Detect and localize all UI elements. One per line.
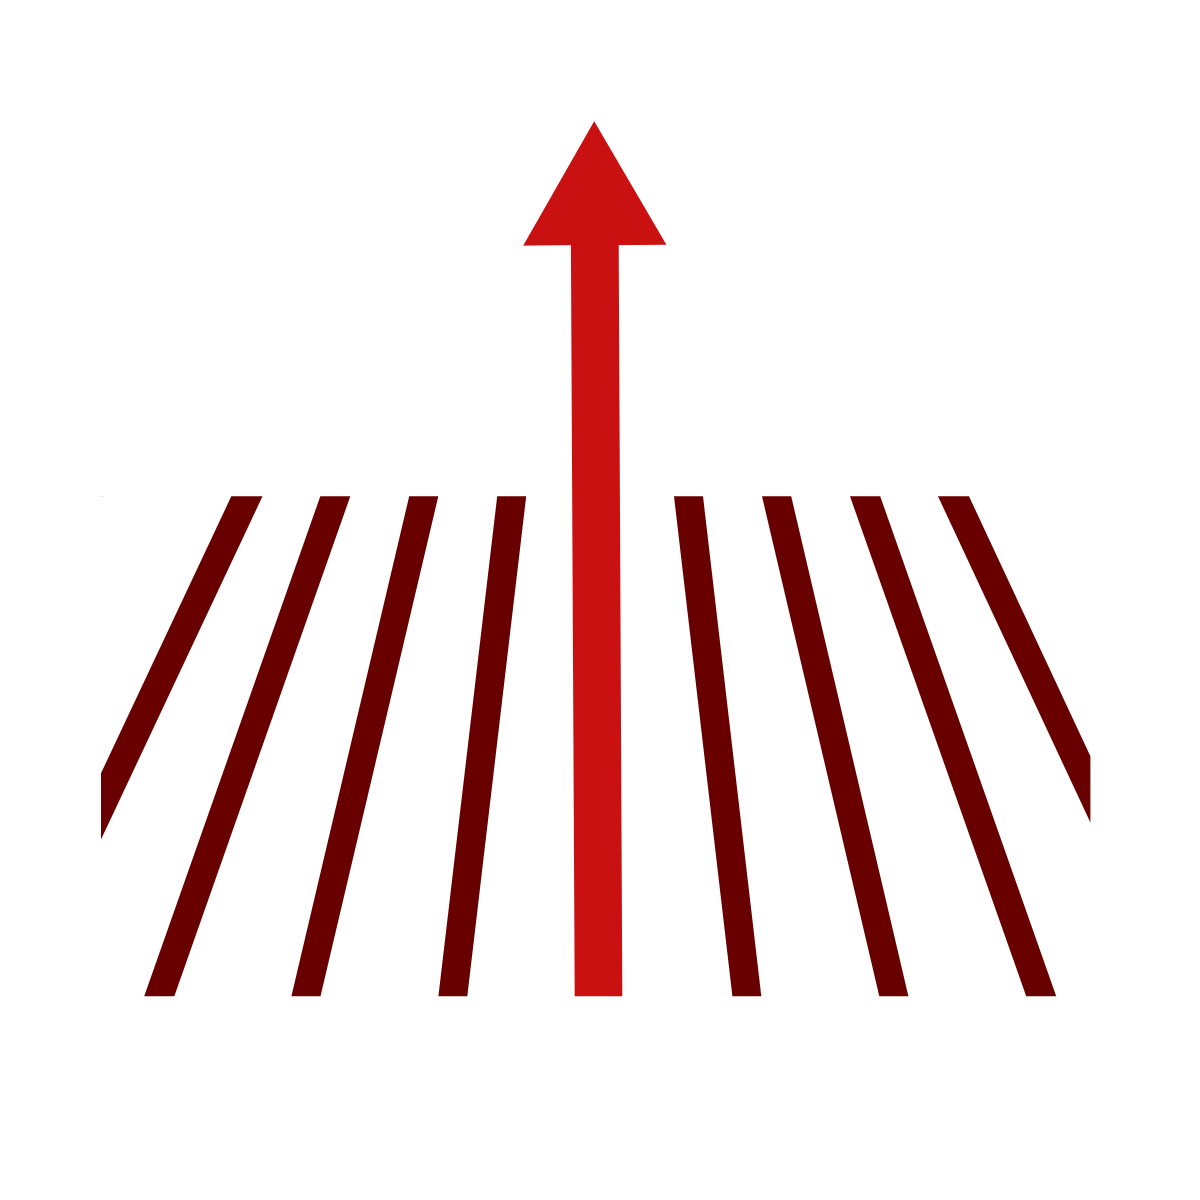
- faint speck at the clipped left edge: [101, 496, 103, 497]
- line 4 left: [438, 496, 526, 996]
- red upward arrow: [523, 121, 666, 996]
- line 4 right: [938, 496, 1090, 822]
- line 1 right: [674, 496, 761, 996]
- line 3 left: [291, 496, 438, 996]
- line 3 right: [850, 496, 1056, 996]
- line 2 right: [762, 496, 908, 996]
- converging dark red lines: [101, 496, 1090, 996]
- line 1 left: [101, 496, 262, 840]
- line 2 left: [144, 496, 350, 996]
